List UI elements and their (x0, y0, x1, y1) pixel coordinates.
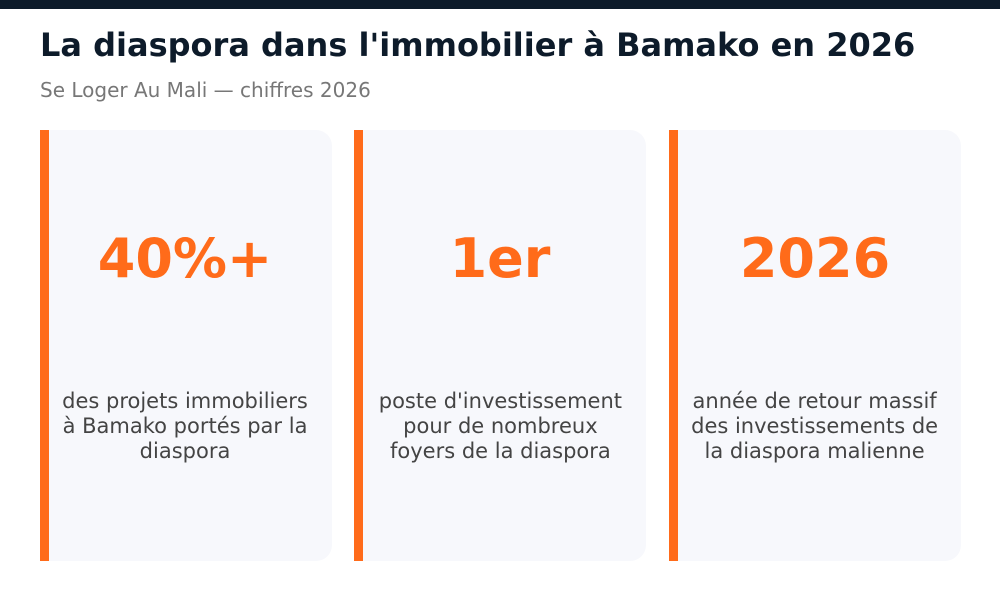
big number: 40%+ (98, 227, 272, 290)
description: des projets immobiliers (62, 389, 308, 413)
panel: 40%+ (40, 130, 332, 561)
accent bar (354, 130, 363, 561)
big number: 1er (450, 227, 551, 290)
description: diaspora (140, 439, 230, 463)
description: foyers de la diaspora (390, 439, 611, 463)
description: des investissements de (691, 414, 938, 438)
description: poste d'investissement (379, 389, 622, 413)
panel: 1er (354, 130, 646, 561)
accent bar (40, 130, 49, 561)
card background (354, 130, 646, 561)
title: La diaspora dans l'immobilier à Bamako en 2026 (40, 26, 915, 64)
description: pour de nombreux (403, 414, 598, 438)
top band (0, 0, 1000, 9)
panel: 2026 (669, 130, 961, 561)
description: à Bamako portés par la (63, 414, 307, 438)
big number: 2026 (740, 227, 890, 290)
accent bar (669, 130, 678, 561)
card background (669, 130, 961, 561)
subtitle: Se Loger Au Mali — chiffres 2026 (40, 78, 371, 102)
description: la diaspora malienne (705, 439, 925, 463)
description: année de retour massif (693, 389, 937, 413)
card background (40, 130, 332, 561)
